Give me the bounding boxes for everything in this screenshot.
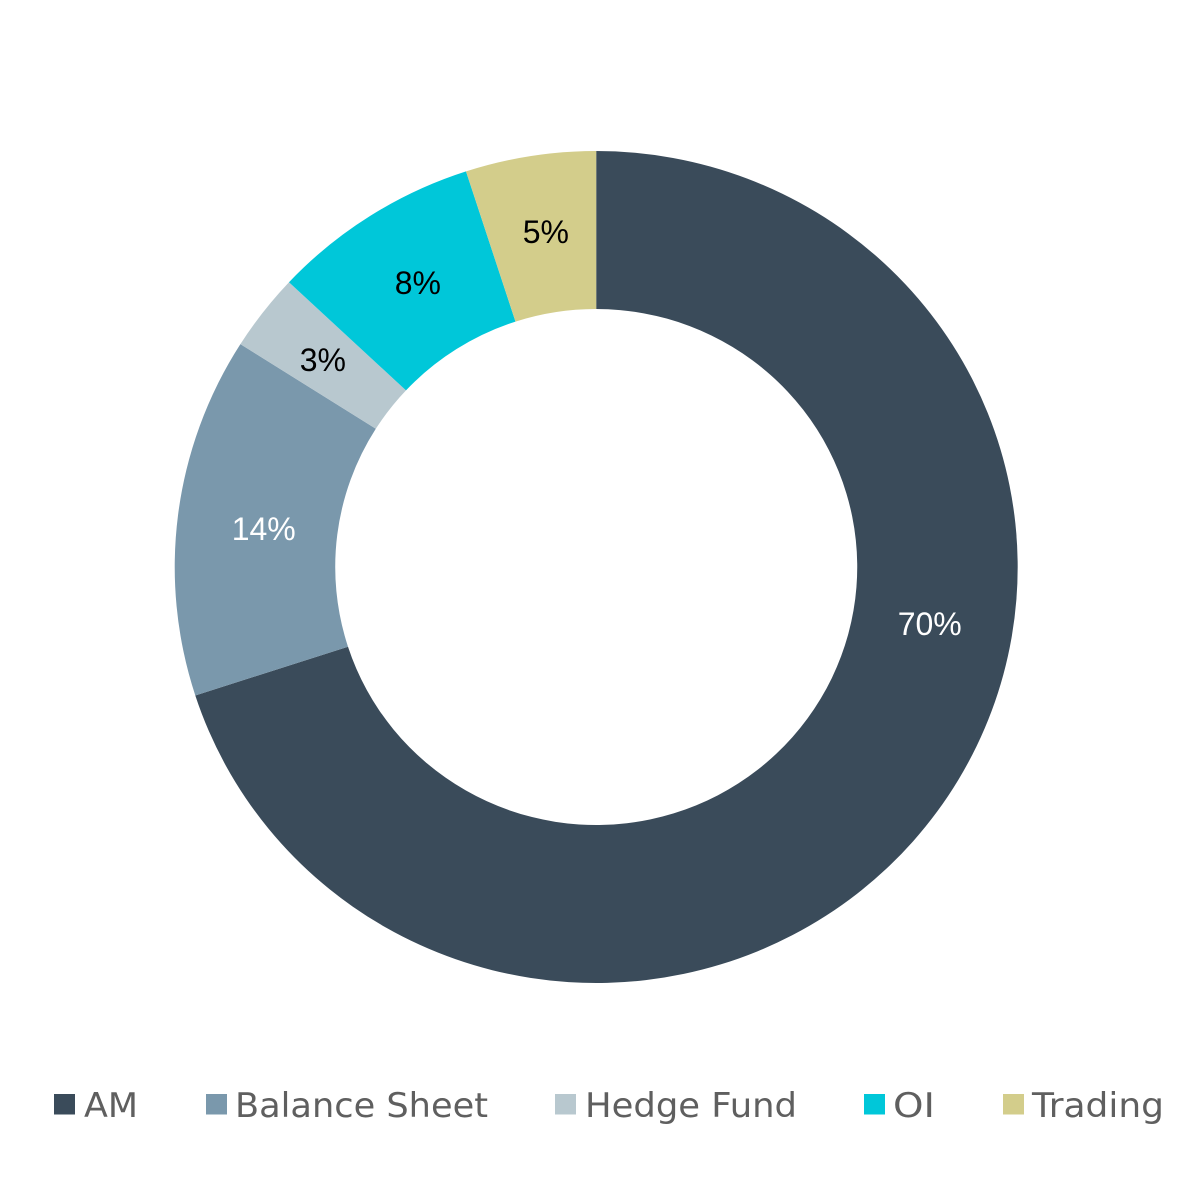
label: 8%: 8% xyxy=(395,265,441,301)
label: 70%: 70% xyxy=(898,606,962,642)
legend xyxy=(54,1086,1164,1126)
slice: Trading 5% xyxy=(466,151,596,322)
legend item: AM xyxy=(54,1086,138,1126)
legend item: Trading: Trading xyxy=(1031,1086,1164,1126)
donut chart xyxy=(175,151,1018,983)
label: 5%: 5% xyxy=(523,214,569,250)
legend item: OI: OI xyxy=(893,1086,935,1126)
legend item: OI xyxy=(864,1086,935,1126)
legend item: AM: AM xyxy=(84,1086,138,1126)
label: 14%: 14% xyxy=(232,511,296,547)
slice: OI 8% xyxy=(289,171,516,390)
slice: AM 70% xyxy=(195,151,1018,983)
slice: Hedge Fund 3% xyxy=(240,282,406,429)
slice: Balance Sheet 14% xyxy=(175,344,376,696)
legend item: Balance Sheet: Balance Sheet xyxy=(235,1086,488,1126)
legend item: Hedge Fund: Hedge Fund xyxy=(585,1086,797,1126)
label: 3%: 3% xyxy=(300,342,346,378)
